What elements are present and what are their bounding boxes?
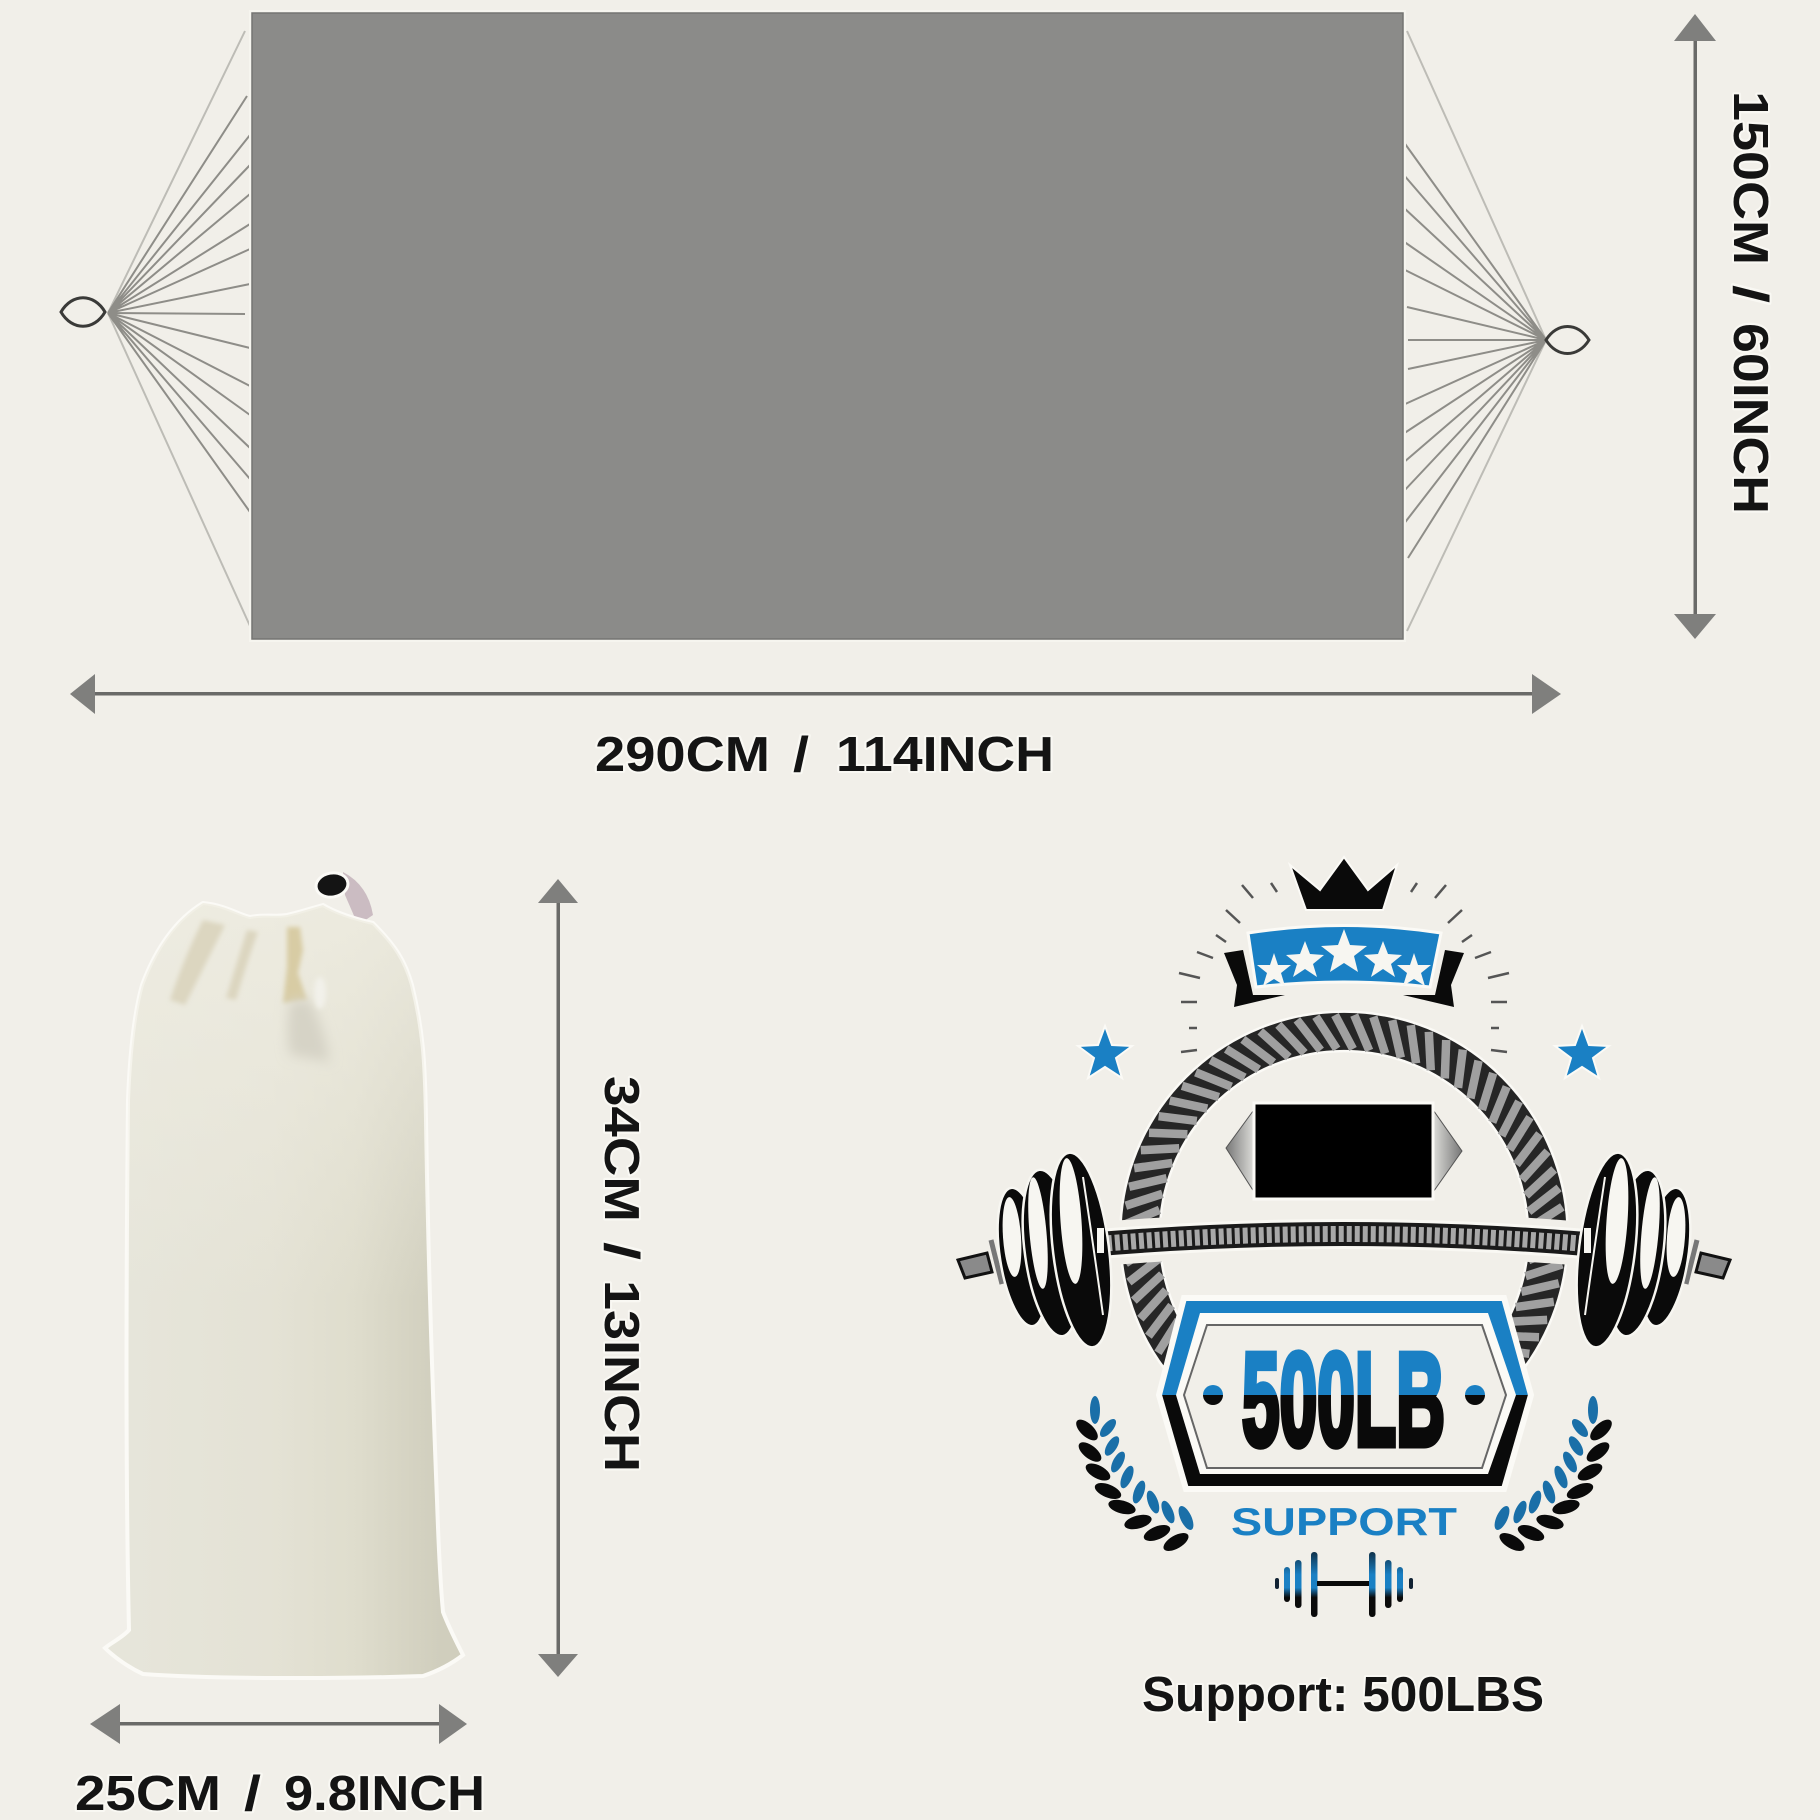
barbell plates: right (1567, 1149, 1730, 1351)
label: hammock height: 150CM (1723, 91, 1777, 265)
label: hammock width: 114INCH (836, 728, 1054, 782)
arrow: bag width (90, 1704, 467, 1744)
right hanging ring (1546, 326, 1589, 354)
label: bag height: 13INCH (594, 1280, 648, 1472)
label: bag width (75, 1767, 485, 1820)
bag folds (170, 920, 330, 1062)
laurel: right (1492, 1396, 1615, 1555)
label: bag width: 9.8INCH (284, 1767, 485, 1820)
caption: support weight: Support: 500LBS (1142, 1668, 1544, 1722)
storage bag (105, 870, 463, 1678)
barbell bar (1099, 1234, 1586, 1244)
shield dot: left (1203, 1385, 1223, 1405)
arrow: bag height (538, 879, 578, 1677)
label: bag height (594, 1076, 648, 1472)
label: hammock width: / (793, 728, 809, 782)
ribbon with five stars (1224, 926, 1464, 1007)
capacity number: 500LB (1242, 1326, 1445, 1473)
hammock diagram (61, 10, 1589, 642)
label: hammock height (1723, 91, 1777, 514)
label: bag height: / (594, 1242, 648, 1260)
arrow: hammock width (70, 674, 1561, 714)
left hanging ring (61, 298, 105, 326)
icon: crown (1290, 857, 1397, 910)
hammock bed (249, 10, 1406, 642)
laurel: left (1073, 1396, 1196, 1555)
arrow: hammock height (1674, 14, 1716, 639)
icon: radiating rays (1179, 883, 1509, 1052)
bag toggle (314, 870, 373, 925)
icon: left star (1078, 1026, 1132, 1078)
shield dot: right (1465, 1385, 1485, 1405)
label: hammock height: 60INCH (1723, 323, 1777, 514)
label: hammock width: 290CM (595, 728, 770, 782)
label: hammock width (595, 728, 1054, 782)
support word: SUPPORT (1231, 1501, 1457, 1544)
rope ring (1124, 1015, 1564, 1369)
shield with 500LB (1159, 1298, 1531, 1489)
icon: small dumbbell (1275, 1552, 1413, 1617)
black centre block with side ornaments (1226, 1103, 1462, 1199)
label: bag width: / (244, 1767, 261, 1820)
bag body (105, 903, 463, 1678)
weight capacity badge (958, 857, 1730, 1617)
left hammock cords (108, 31, 250, 626)
label: bag width: 25CM (75, 1767, 221, 1820)
label: bag height: 34CM (594, 1076, 648, 1222)
label: hammock height: / (1723, 285, 1777, 303)
icon: right star (1555, 1026, 1609, 1078)
right hammock cords (1403, 31, 1546, 631)
barbell plates: left (958, 1149, 1121, 1351)
